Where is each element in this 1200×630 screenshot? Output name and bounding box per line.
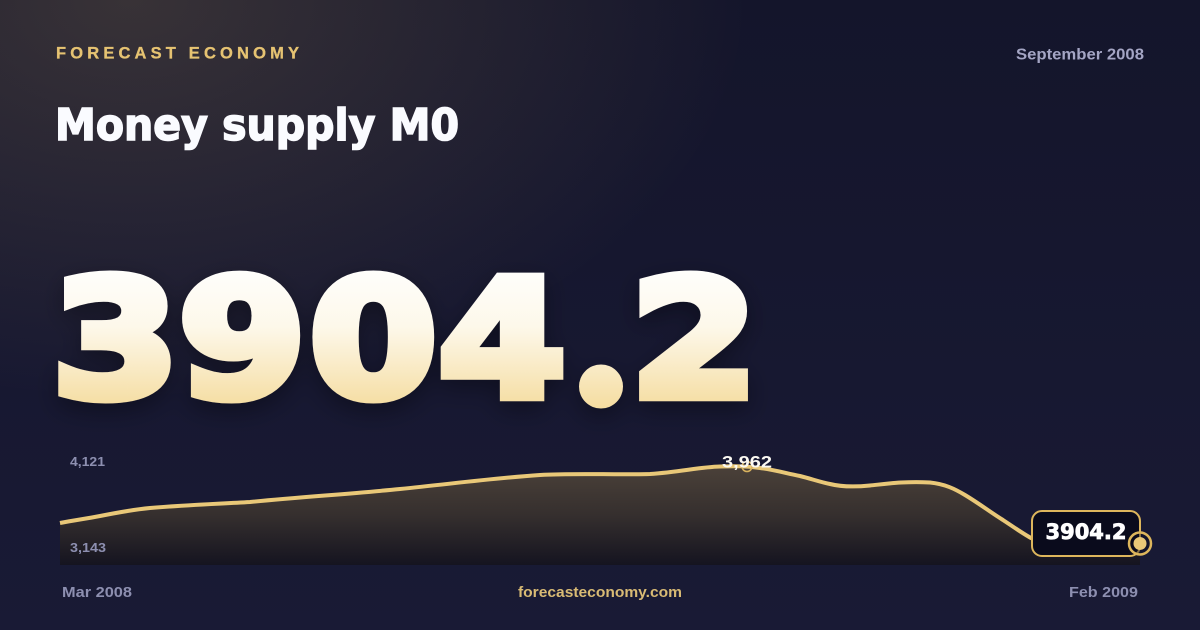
peak marker bbox=[742, 462, 752, 472]
brand eyebrow: FORECAST ECONOMY bbox=[56, 44, 299, 62]
start date label: Mar 2008 bbox=[62, 584, 132, 601]
current value marker bbox=[1129, 532, 1151, 554]
axis min label: 3,143 bbox=[70, 540, 106, 555]
end date label: Feb 2009 bbox=[1069, 584, 1138, 601]
website: forecasteconomy.com bbox=[518, 584, 682, 601]
big value: 3904.2 bbox=[52, 246, 758, 434]
current value badge bbox=[1032, 511, 1140, 556]
peak label: 3,962 bbox=[722, 452, 772, 472]
axis max label: 4,121 bbox=[70, 454, 105, 469]
area chart bbox=[60, 452, 1140, 565]
current value badge: 3904.2 bbox=[1046, 520, 1126, 544]
chart area fill bbox=[60, 466, 1140, 565]
chart line bbox=[60, 466, 1032, 538]
date label: September 2008 bbox=[1016, 46, 1144, 64]
title: Money supply M0 bbox=[55, 100, 459, 151]
